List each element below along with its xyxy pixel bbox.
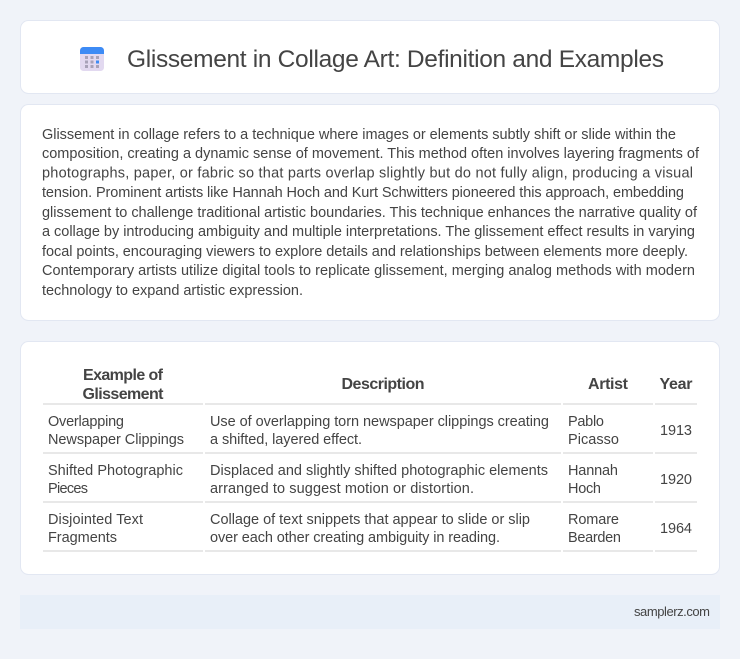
table header: Artist [588,376,629,393]
footer text: samplerz.com [634,604,710,619]
description text: photographs, paper, or fabric so that parts overlap slightly but do not fully align, producing a visual [42,166,693,182]
table header: Glissement [82,386,164,403]
table header: Description [342,376,424,393]
row: Disjointed Text Fragments: Bearden [568,530,621,546]
row: Disjointed Text Fragments: 1964 [660,521,692,537]
description text: a collage by introducing ambiguity and multiple interpretations. The glissement effect results in varying [42,224,695,240]
panel: description [20,104,720,320]
row: Overlapping Newspaper Clippings: Newspaper Clippings [48,432,184,448]
row: Disjointed Text Fragments: Collage of text snippets that appear to slide or slip [210,512,530,528]
row: Shifted Photographic Pieces: Displaced and slightly shifted photographic elements [210,463,548,479]
description text: focal points, encouraging viewers to explore details and relationships between elements more deeply. [42,244,688,260]
row: Shifted Photographic Pieces [48,463,692,497]
row: Shifted Photographic Pieces: Hannah [568,463,618,479]
description text: glissement to challenge traditional artistic boundaries. This technique enhances the narrative quality of [42,205,698,221]
row: Overlapping Newspaper Clippings: 1913 [660,423,692,439]
description text: Glissement in collage refers to a technique where images or elements subtly shift or slide within the [42,127,676,143]
row: Shifted Photographic Pieces: Pieces [48,481,88,497]
row: Overlapping Newspaper Clippings: Pablo [568,414,604,430]
description text [42,127,700,299]
header panel [20,20,720,94]
row: Disjointed Text Fragments: Romare [568,512,619,528]
description text: technology to expand artistic expression. [42,283,303,299]
row: Shifted Photographic Pieces: Hoch [568,481,601,497]
table header: Example of [83,367,164,384]
row: Overlapping Newspaper Clippings: Picasso [568,432,619,448]
title: Glissement in Collage Art: Definition and Examples [127,46,664,73]
description text: composition, creating a dynamic sense of movement. This method often involves layering fragments of [42,146,700,162]
icon: calendar [80,47,104,71]
row: Overlapping Newspaper Clippings: Overlapping [48,414,124,430]
row: Overlapping Newspaper Clippings: a shifted, layered effect. [210,432,362,448]
panel: table [20,342,720,574]
table header [82,367,692,403]
row: Disjointed Text Fragments: Disjointed Text [48,512,143,528]
row: Overlapping Newspaper Clippings [48,414,692,448]
row: Shifted Photographic Pieces: Shifted Photographic [48,463,183,479]
table header: Year [660,376,692,393]
description text: tension. Prominent artists like Hannah Hoch and Kurt Schwitters pioneered this approach, embedding [42,185,684,201]
description text: Contemporary artists utilize digital tools to replicate glissement, merging analog methods with modern [42,263,695,279]
row: Shifted Photographic Pieces: arranged to suggest motion or distortion. [210,481,474,497]
row: Disjointed Text Fragments: over each other creating ambiguity in reading. [210,530,500,546]
row: Disjointed Text Fragments [48,512,692,546]
row: Shifted Photographic Pieces: 1920 [660,472,692,488]
footer bar [20,595,720,629]
row: Overlapping Newspaper Clippings: Use of overlapping torn newspaper clippings creating [210,414,549,430]
row: Disjointed Text Fragments: Fragments [48,530,117,546]
